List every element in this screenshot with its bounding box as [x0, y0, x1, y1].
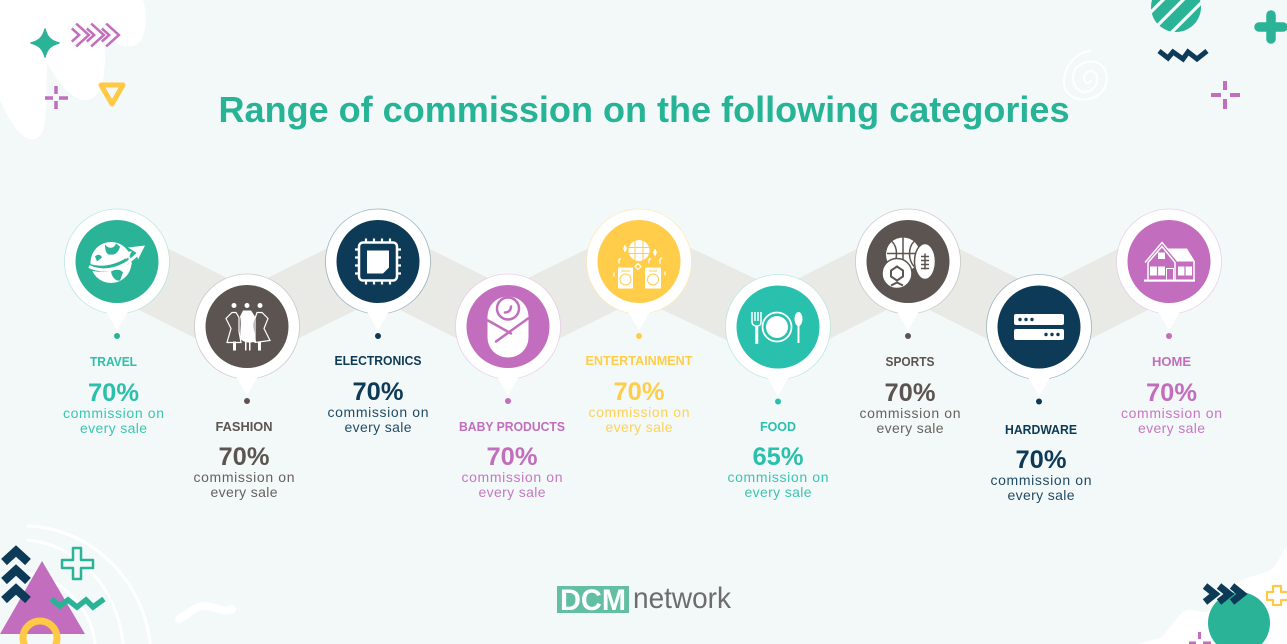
- decoration: top-right shapes: [1064, 0, 1283, 109]
- icon: house: [1144, 242, 1195, 282]
- label: fashion: commission on: [194, 469, 294, 485]
- decoration: top-left blobs and shapes: [0, 0, 146, 139]
- label: sports: SPORTS: [886, 355, 934, 369]
- decoration: bottom-left shapes: [0, 526, 232, 644]
- label: hardware: HARDWARE: [1005, 423, 1077, 437]
- white swoosh: [179, 606, 232, 619]
- pin: fashion: [194, 274, 300, 404]
- label: fashion: [194, 420, 294, 500]
- label: food: 65%: [752, 443, 804, 471]
- pin: baby products: [456, 274, 560, 404]
- label: home: HOME: [1152, 355, 1191, 369]
- icon: white spiral: [1064, 51, 1107, 99]
- label: entertainment: ENTERTAINMENT: [586, 354, 693, 368]
- icon: navy up chevrons: [4, 551, 28, 600]
- icon: green zigzag: [51, 599, 104, 607]
- label: food: FOOD: [760, 420, 796, 434]
- pin: sports: [856, 209, 960, 339]
- icon: navy zigzag: [1159, 51, 1207, 59]
- label: travel: 70%: [88, 379, 139, 407]
- pin: home: [1116, 209, 1222, 339]
- pin: travel: [64, 209, 170, 339]
- label: electronics: commission on: [328, 404, 428, 420]
- label: home: commission on: [1121, 405, 1222, 421]
- label: fashion: every sale: [210, 484, 278, 500]
- icon: navy chevrons: [1205, 586, 1242, 602]
- icon: yellow ring: [23, 621, 57, 644]
- label: baby products: 70%: [486, 443, 538, 471]
- white arcs: [27, 526, 150, 644]
- icon: plate and cutlery: [752, 312, 802, 343]
- label: baby products: commission on: [462, 469, 562, 485]
- label: hardware: [990, 423, 1092, 503]
- label: hardware: every sale: [1008, 487, 1075, 503]
- icon: three dresses: [226, 303, 270, 350]
- logo: DCM network: DCM: [560, 584, 626, 617]
- icon: server racks: [1014, 314, 1064, 340]
- label: entertainment: [586, 354, 693, 435]
- label: fashion: FASHION: [216, 420, 272, 434]
- label: food: commission on: [728, 469, 828, 485]
- label: electronics: 70%: [352, 378, 404, 406]
- label: electronics: ELECTRONICS: [334, 354, 422, 368]
- label: travel: commission on: [63, 405, 164, 421]
- icon: yellow outlined plus: [1267, 586, 1287, 605]
- label: travel: TRAVEL: [90, 355, 137, 369]
- icon: yellow triangle: [101, 85, 123, 104]
- pin: food: [726, 274, 830, 404]
- logo: DCM network: network: [633, 582, 732, 615]
- label: travel: every sale: [80, 420, 147, 436]
- icon: disco ball and speakers: [614, 240, 665, 288]
- label: sports: [860, 355, 960, 436]
- pin: entertainment: [586, 209, 692, 339]
- decoration: bottom-right shapes: [1138, 547, 1287, 644]
- icon: microchip: [355, 238, 401, 284]
- label: sports: every sale: [876, 420, 944, 436]
- icon: globe with plane: [88, 242, 145, 283]
- icon: green star: [31, 29, 59, 57]
- label: baby products: every sale: [478, 484, 546, 500]
- zigzag connector band: [117, 261, 1169, 327]
- icon: purple triangle: [0, 561, 85, 634]
- label: food: [728, 420, 828, 500]
- icon: purple plus: [1211, 81, 1240, 109]
- icon: outlined chevrons: [74, 26, 114, 44]
- icon: green plus: [1259, 15, 1283, 39]
- icon: swaddled baby: [488, 296, 528, 358]
- icon: purple plus: [1189, 632, 1211, 643]
- label: entertainment: every sale: [606, 419, 673, 435]
- label: entertainment: 70%: [614, 378, 664, 406]
- icon: teal circle: [1208, 592, 1270, 644]
- label: hardware: 70%: [1016, 446, 1066, 474]
- pin: hardware: [986, 274, 1092, 404]
- icon: sports balls: [882, 238, 936, 288]
- logo: DCM network: [557, 582, 732, 617]
- label: baby products: [459, 420, 565, 500]
- label: food: every sale: [744, 484, 812, 500]
- label: home: 70%: [1146, 379, 1197, 407]
- label: sports: commission on: [860, 405, 960, 421]
- pin: electronics: [326, 209, 430, 339]
- icon: striped circle: [1145, 0, 1212, 36]
- label: home: [1121, 355, 1222, 436]
- label: sports: 70%: [884, 379, 936, 407]
- title: Range of commission on the following categories: [218, 89, 1070, 130]
- label: baby products: BABY PRODUCTS: [459, 420, 565, 434]
- icon: purple plus: [45, 86, 68, 109]
- label: home: every sale: [1138, 420, 1205, 436]
- label: fashion: 70%: [218, 443, 270, 471]
- label: travel: [63, 355, 164, 436]
- icon: outlined plus: [62, 548, 93, 579]
- label: hardware: commission on: [990, 472, 1092, 488]
- label: electronics: every sale: [344, 419, 412, 435]
- label: entertainment: commission on: [588, 404, 690, 420]
- label: electronics: [328, 354, 428, 435]
